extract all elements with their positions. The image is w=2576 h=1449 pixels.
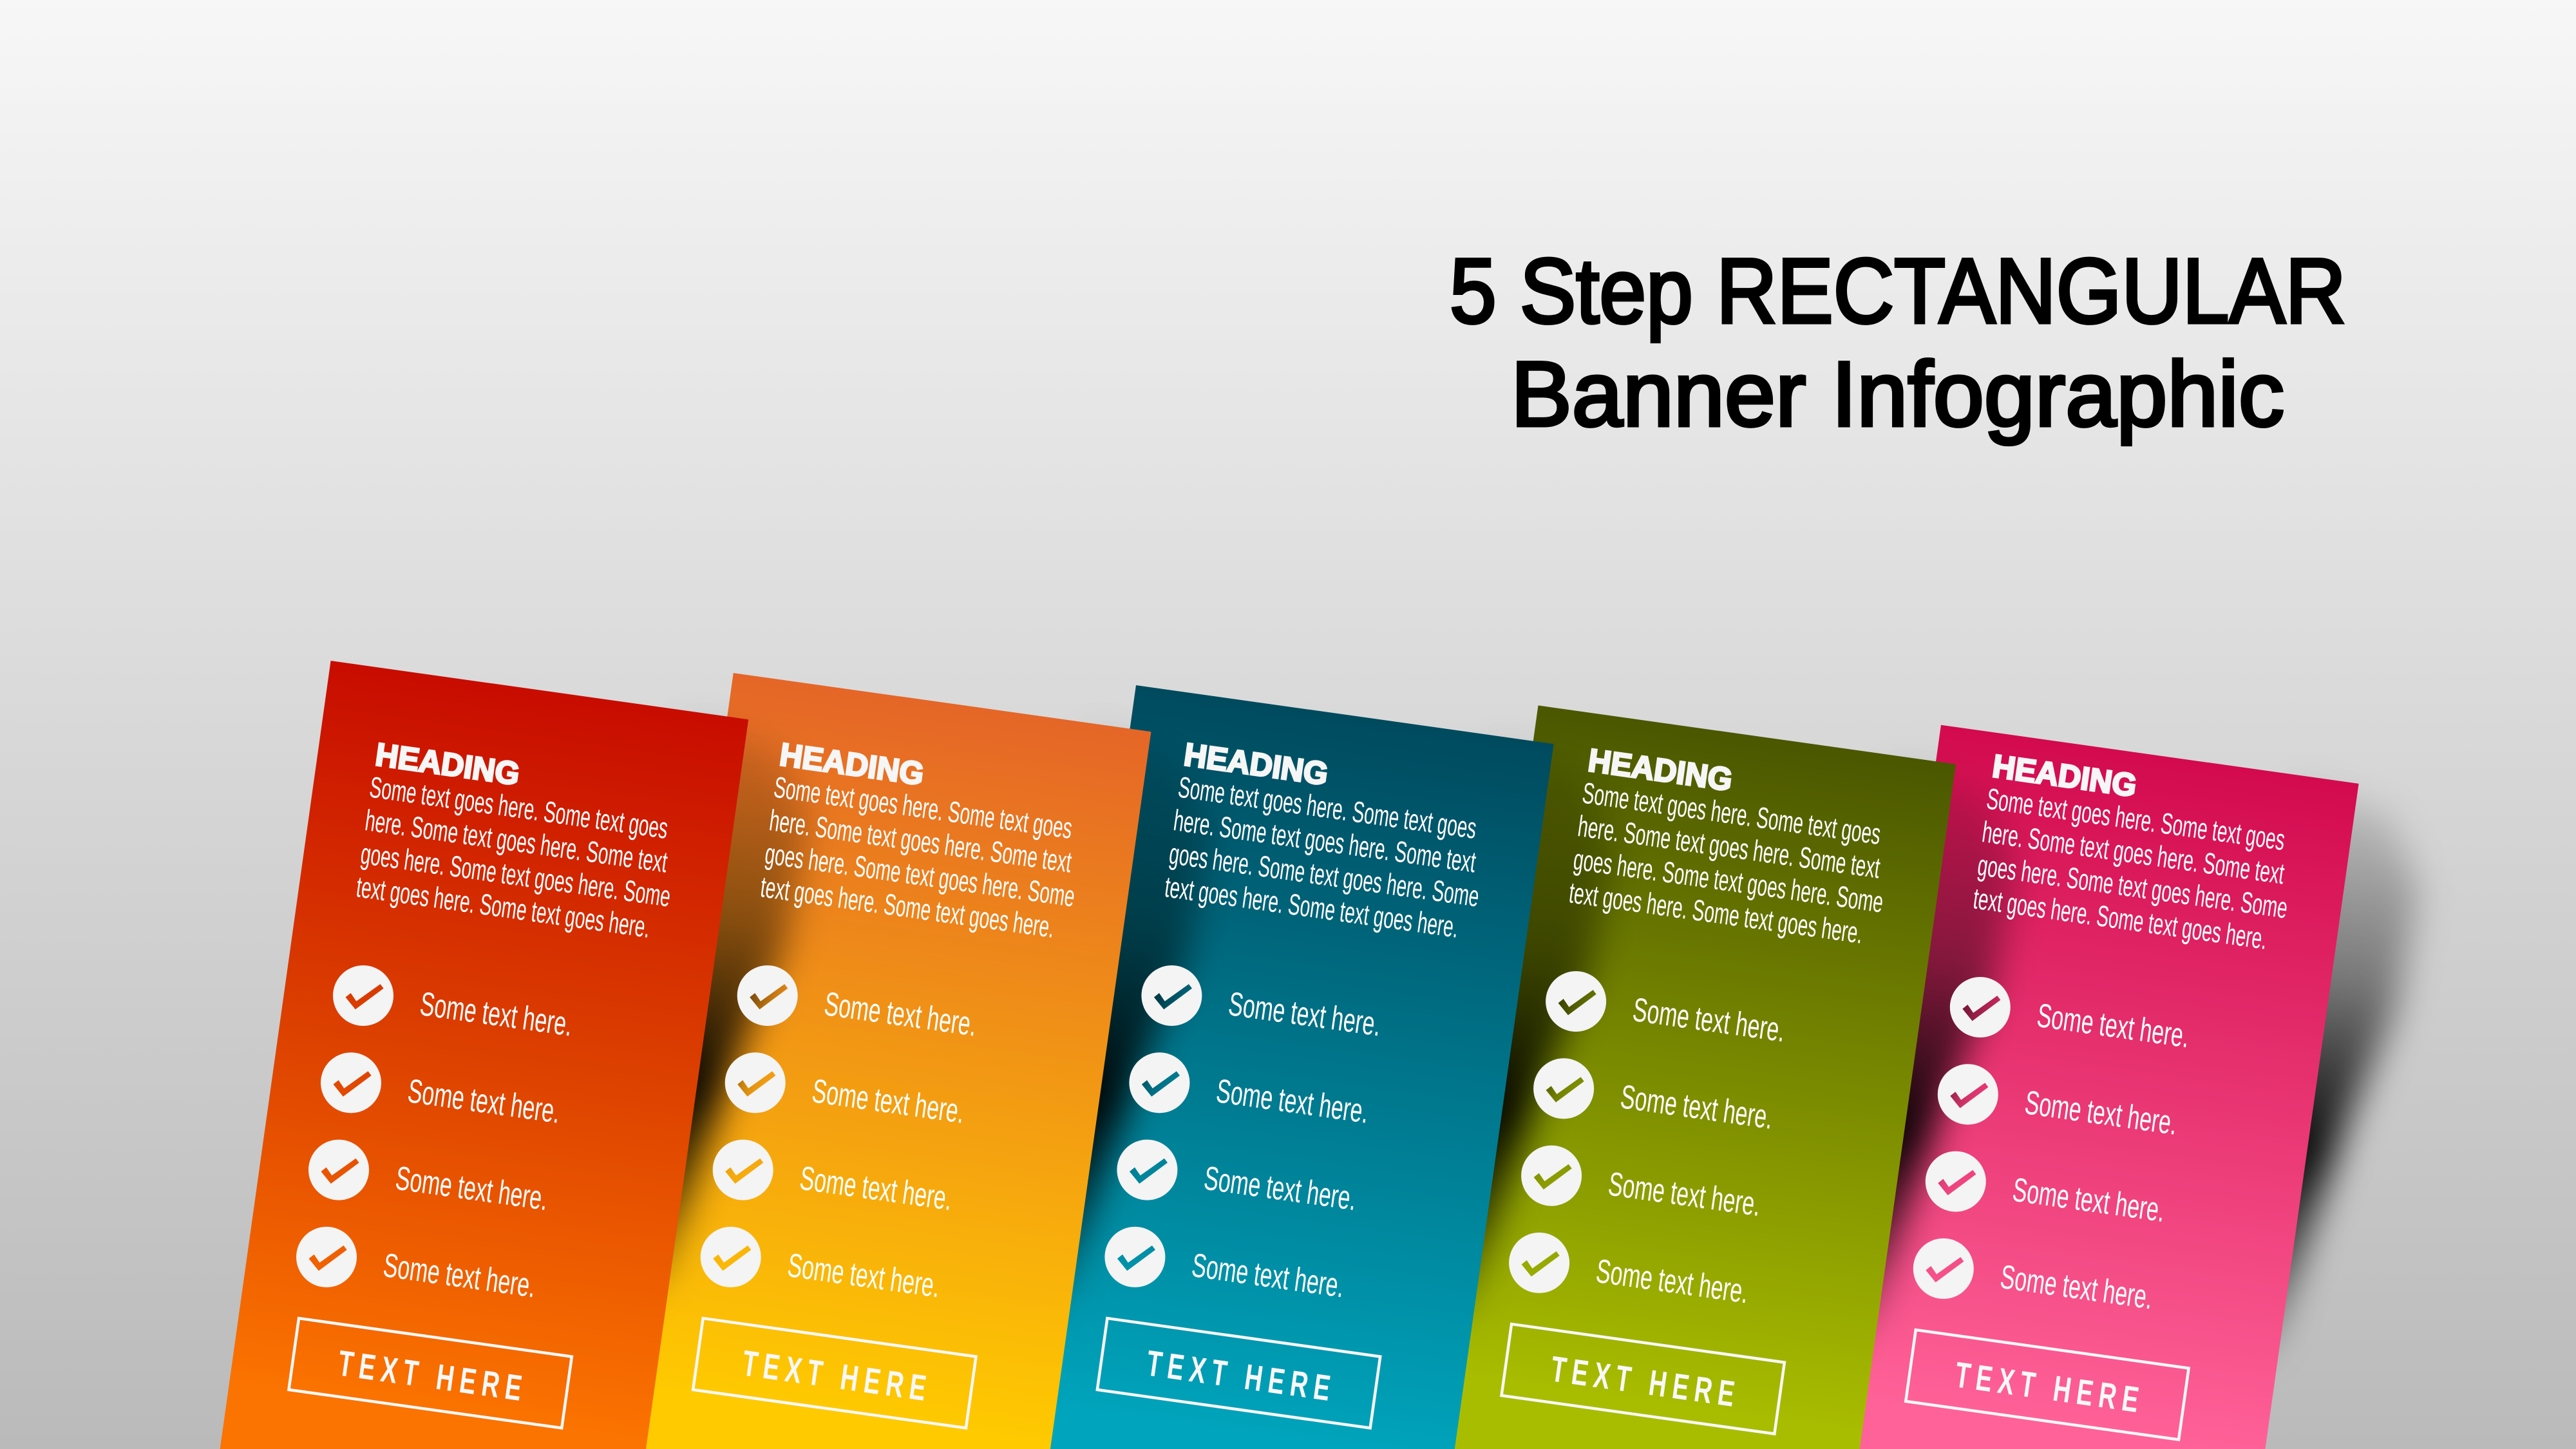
card 3 background bbox=[1028, 685, 1554, 1449]
card 2 body text bbox=[759, 770, 1077, 944]
card 4 body text bbox=[1567, 776, 1886, 950]
card 5 item 2: Some text here. bbox=[2023, 1084, 2179, 1142]
shadow of card 4 bbox=[1809, 762, 2029, 1387]
title: 5 Step RECTANGULAR bbox=[1450, 240, 2346, 343]
card 4 button: TEXT HERE bbox=[1548, 1349, 1737, 1415]
card 1 background bbox=[220, 661, 748, 1449]
card 1 item 1: Some text here. bbox=[418, 985, 574, 1044]
card 1 body text: here. Some text goes here. Some text bbox=[363, 803, 670, 879]
panel: card 1 surface bbox=[220, 661, 821, 1449]
card 2 heading: HEADING bbox=[777, 736, 926, 792]
card 3 button: TEXT HERE bbox=[1144, 1343, 1332, 1409]
card 2 body text: text goes here. Some text goes here. bbox=[759, 869, 1057, 944]
card 1 item 4: Some text here. bbox=[381, 1247, 538, 1305]
card 3 item 1: Some text here. bbox=[1226, 985, 1383, 1044]
card 1 body text: Some text goes here. Some text goes bbox=[368, 770, 670, 845]
card 2 button: TEXT HERE bbox=[740, 1343, 929, 1409]
panel: card 4 surface bbox=[1434, 705, 2029, 1449]
card 4 body text: text goes here. Some text goes here. bbox=[1567, 875, 1865, 950]
card 1 body text: text goes here. Some text goes here. bbox=[354, 869, 652, 944]
card 5 item 3: Some text here. bbox=[2011, 1171, 2167, 1229]
card 5 item 3 bbox=[1926, 1151, 2167, 1229]
card 3 item 2 bbox=[1129, 1052, 1371, 1131]
card 3 body text: here. Some text goes here. Some text bbox=[1171, 803, 1478, 879]
shadow of card 1 bbox=[602, 717, 821, 1342]
card 4 item 2 bbox=[1533, 1058, 1776, 1137]
panel: card 5 content bbox=[1906, 748, 2289, 1439]
card 4 item 4: Some text here. bbox=[1594, 1253, 1751, 1311]
card 2 item 1 bbox=[737, 965, 979, 1044]
card 5 button bbox=[1906, 1330, 2189, 1439]
card 1 item 2: Some text here. bbox=[406, 1072, 562, 1131]
card 3 body text: goes here. Some text goes here. Some bbox=[1168, 837, 1481, 913]
card 2 item 4 bbox=[701, 1227, 942, 1305]
card 4 item 4 bbox=[1509, 1233, 1751, 1311]
card 1 button bbox=[289, 1318, 572, 1428]
card 3 item 3: Some text here. bbox=[1202, 1160, 1359, 1218]
card 5 item 4 bbox=[1913, 1238, 2155, 1316]
card 1 heading: HEADING bbox=[374, 736, 522, 792]
card 5 button: TEXT HERE bbox=[1953, 1355, 2141, 1421]
card 2 body text: here. Some text goes here. Some text bbox=[768, 803, 1074, 879]
card 3 button bbox=[1097, 1318, 1380, 1428]
card 4 body text: Some text goes here. Some text goes bbox=[1580, 776, 1883, 851]
card 1 item 3 bbox=[308, 1140, 550, 1218]
card 2 body text: goes here. Some text goes here. Some bbox=[763, 837, 1077, 913]
card 2 item 3: Some text here. bbox=[797, 1160, 954, 1218]
card 4 item 1: Some text here. bbox=[1631, 991, 1788, 1050]
panel: card 2 surface bbox=[625, 673, 1224, 1449]
card 1 button: TEXT HERE bbox=[336, 1343, 524, 1409]
card 1 body text bbox=[354, 770, 673, 944]
card 2 body text: Some text goes here. Some text goes bbox=[772, 770, 1074, 845]
card 5 item 4: Some text here. bbox=[1998, 1258, 2155, 1316]
card 4 button bbox=[1502, 1324, 1785, 1434]
panel: card 1 content bbox=[289, 736, 673, 1428]
card 3 item 1 bbox=[1141, 965, 1383, 1044]
card 4 item 2: Some text here. bbox=[1618, 1078, 1776, 1137]
card 2 button bbox=[693, 1318, 976, 1428]
card 3 item 4 bbox=[1104, 1227, 1347, 1305]
card 1 item 4 bbox=[296, 1227, 538, 1305]
shadow of card 5 bbox=[2212, 782, 2431, 1406]
card 3 item 2: Some text here. bbox=[1214, 1072, 1371, 1131]
card 3 body text bbox=[1163, 770, 1481, 944]
card 2 item 4: Some text here. bbox=[785, 1247, 942, 1305]
panel: card 3 surface bbox=[1028, 685, 1626, 1449]
panel: card 4 content bbox=[1502, 742, 1886, 1434]
card 4 item 1 bbox=[1546, 971, 1788, 1050]
card 4 item 3 bbox=[1521, 1146, 1763, 1224]
card 4 body text: here. Some text goes here. Some text bbox=[1576, 809, 1882, 885]
card 2 background bbox=[625, 673, 1151, 1449]
card 5 background bbox=[1839, 725, 2359, 1449]
panel: card 3 content bbox=[1097, 736, 1481, 1428]
card 3 item 4: Some text here. bbox=[1189, 1247, 1347, 1305]
card 5 item 2 bbox=[1938, 1064, 2179, 1142]
card 2 item 3 bbox=[713, 1140, 954, 1218]
card 5 body text: Some text goes here. Some text goes bbox=[1985, 782, 2287, 857]
card 5 item 1 bbox=[1950, 977, 2192, 1056]
card 4 background bbox=[1434, 705, 1956, 1449]
card 5 body text: here. Some text goes here. Some text bbox=[1980, 815, 2287, 891]
card 5 body text: text goes here. Some text goes here. bbox=[1971, 881, 2269, 956]
card 3 body text: Some text goes here. Some text goes bbox=[1176, 770, 1479, 845]
card 5 body text: goes here. Some text goes here. Some bbox=[1976, 848, 2289, 925]
card 1 item 3: Some text here. bbox=[393, 1160, 550, 1218]
card 5 heading: HEADING bbox=[1991, 748, 2139, 804]
card 1 item 2 bbox=[321, 1052, 562, 1131]
title: Banner Infographic bbox=[1511, 343, 2284, 446]
card 3 body text: text goes here. Some text goes here. bbox=[1163, 869, 1461, 944]
card 2 item 2 bbox=[725, 1052, 967, 1131]
shadow of card 3 bbox=[1407, 742, 1626, 1367]
title bbox=[1450, 240, 2346, 446]
card 3 item 3 bbox=[1117, 1140, 1359, 1218]
panel: card 5 surface bbox=[1839, 725, 2431, 1449]
panel: card 2 content bbox=[693, 736, 1077, 1428]
card 5 item 1: Some text here. bbox=[2035, 997, 2192, 1056]
card 3 heading: HEADING bbox=[1182, 736, 1331, 792]
shadow of card 2 bbox=[1005, 730, 1224, 1354]
card 5 body text bbox=[1971, 782, 2289, 956]
card 4 item 3: Some text here. bbox=[1606, 1166, 1763, 1224]
card 1 item 1 bbox=[333, 965, 574, 1044]
card 4 body text: goes here. Some text goes here. Some bbox=[1571, 842, 1886, 919]
card 4 heading: HEADING bbox=[1586, 742, 1734, 798]
card 2 item 1: Some text here. bbox=[822, 985, 979, 1044]
card 1 body text: goes here. Some text goes here. Some bbox=[359, 837, 673, 913]
card 2 item 2: Some text here. bbox=[810, 1072, 967, 1131]
